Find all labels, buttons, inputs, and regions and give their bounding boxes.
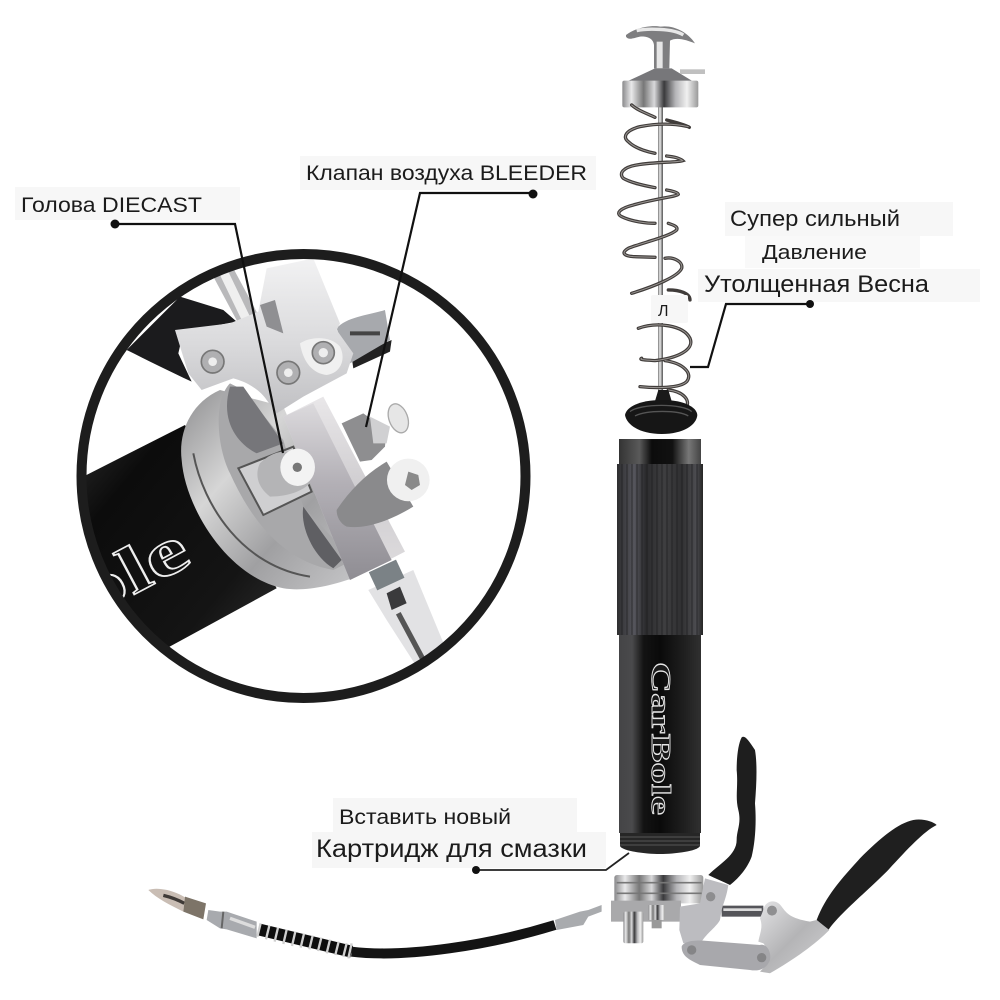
pin and black sleeve xyxy=(352,340,392,368)
lens ring xyxy=(82,254,526,698)
leader line: diecast head xyxy=(110,220,283,453)
quick coupler xyxy=(207,910,257,938)
barrel logo in lens: ole xyxy=(63,512,201,631)
hex block xyxy=(287,396,405,565)
die-cast head disc xyxy=(181,390,357,589)
T handle xyxy=(626,26,695,68)
bracket rivets xyxy=(201,350,224,373)
nozzle tip xyxy=(148,889,185,912)
spring coils xyxy=(619,105,691,407)
label: cartridge callout xyxy=(312,798,606,868)
cartridge ring xyxy=(614,875,703,903)
valve fitting xyxy=(648,905,665,920)
outlet nipple xyxy=(623,912,643,943)
barrel neck xyxy=(619,439,701,465)
leader line: cartridge xyxy=(472,853,629,874)
main gun barrel assembly xyxy=(617,439,703,854)
label: spring callout: Супер сильный xyxy=(730,206,900,231)
link plate xyxy=(679,878,728,943)
label: spring callout: Утолщенная Весна xyxy=(704,271,930,298)
spring guard xyxy=(258,929,352,952)
barrel logo: CarBole xyxy=(646,662,676,815)
detail magnifier circle xyxy=(63,254,526,698)
label fragment on spring xyxy=(651,295,688,323)
label: cartridge callout: Картридж для смазки xyxy=(316,835,587,863)
label: cartridge callout: Вставить новый xyxy=(339,806,511,829)
ribbed barrel sleeve xyxy=(617,464,703,635)
hose fitting in lens xyxy=(368,570,445,667)
side plug xyxy=(337,462,413,527)
leader line: spring xyxy=(690,300,814,367)
rubber seal cup xyxy=(653,390,673,407)
label box: bleeder valve: Клапан воздуха BLEEDER xyxy=(306,162,587,185)
hose end fitting xyxy=(555,905,602,930)
long black lever grip xyxy=(817,820,937,930)
label: spring callout xyxy=(698,202,980,302)
plunger and spring assembly xyxy=(619,26,705,434)
barrel in lens xyxy=(86,425,277,647)
threaded barrel end xyxy=(620,833,700,854)
lower link plate xyxy=(682,941,770,970)
label box: bleeder valve xyxy=(300,156,596,190)
handle bracket xyxy=(175,258,353,413)
connecting rod xyxy=(722,906,763,917)
bleeder valve xyxy=(342,413,387,462)
follower cap xyxy=(627,68,693,82)
label: spring callout: Давление xyxy=(762,242,867,264)
handle strap in lens xyxy=(127,297,237,382)
grease gun head and handle xyxy=(611,737,937,973)
rod background in lens xyxy=(214,270,257,320)
lever body xyxy=(758,901,829,973)
label fragment on spring: Л xyxy=(658,303,668,320)
black hose xyxy=(352,925,555,953)
leader line: bleeder valve xyxy=(366,190,538,427)
bolt with square washer xyxy=(238,447,312,515)
upper black grip xyxy=(708,737,756,885)
plunger rod xyxy=(658,105,663,392)
label box: diecast head: Голова DIECAST xyxy=(21,194,202,217)
head base xyxy=(611,901,681,922)
lower barrel tube xyxy=(619,635,701,833)
grease hose with nozzle xyxy=(148,889,602,958)
label box: diecast head xyxy=(15,187,240,220)
